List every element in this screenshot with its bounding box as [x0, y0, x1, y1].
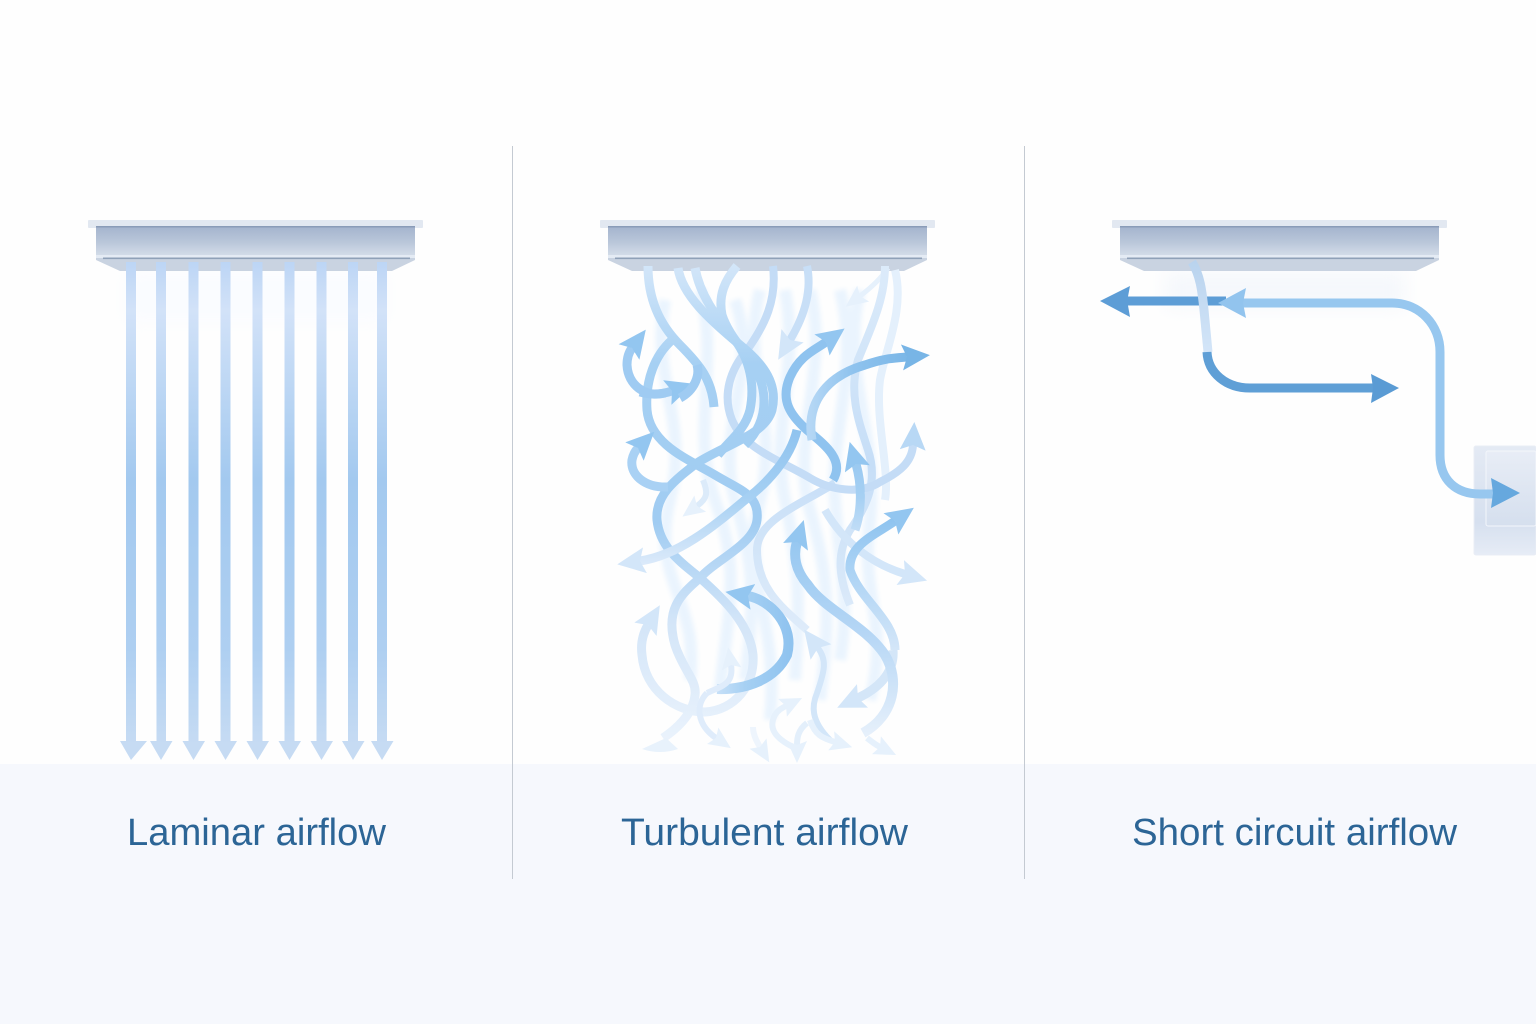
soft glow under laminar duct [125, 272, 387, 322]
bottom label band [0, 764, 1536, 1024]
label: short circuit airflow: Short circuit airflow [1132, 812, 1458, 854]
faint bottom arrows [697, 480, 880, 747]
label: laminar airflow: Laminar airflow [127, 812, 387, 854]
air outlet duct: short circuit [1112, 220, 1447, 271]
arrow: supply air down then right [1192, 262, 1399, 403]
arrow: short-circuit path into return grille [1218, 288, 1520, 508]
faint crescent arrowhead [642, 738, 678, 752]
panel: short circuit airflow [1100, 220, 1536, 854]
pale swirling strands [728, 266, 913, 630]
faint background ribbons [662, 290, 877, 720]
bold directional arrows [627, 342, 907, 733]
air outlet duct: laminar [88, 220, 423, 271]
straight downward arrows [120, 262, 394, 760]
divider [512, 146, 513, 879]
label: turbulent airflow: Turbulent airflow [621, 812, 909, 854]
panel: laminar airflow [88, 220, 423, 854]
main interwoven strands [642, 266, 773, 738]
soft shadow beneath duct [1165, 272, 1405, 308]
divider [1024, 146, 1025, 879]
air outlet duct: turbulent [600, 220, 935, 271]
panel: turbulent airflow [600, 220, 935, 854]
arrow: supply air pushed left [1100, 286, 1226, 317]
return air grille [1474, 446, 1536, 555]
